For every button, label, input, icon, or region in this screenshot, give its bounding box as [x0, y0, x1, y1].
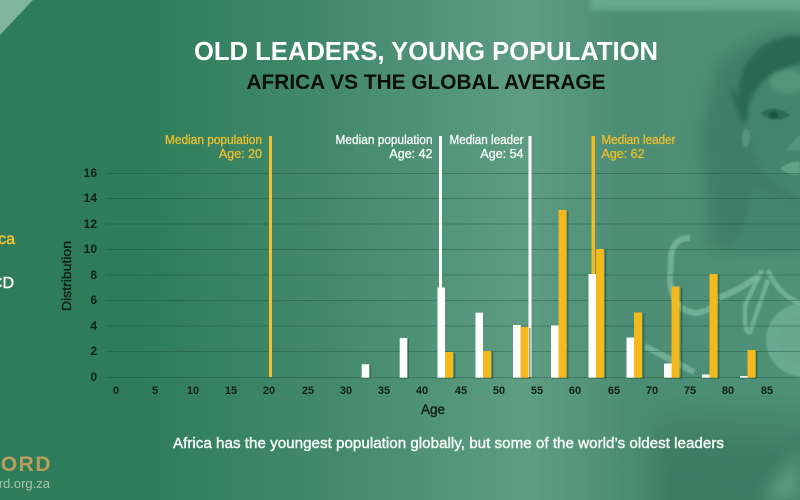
x axis labels: 35: [378, 385, 390, 397]
callout: median leader age 54: Median leader: [450, 133, 524, 147]
callout: median population age 20: [165, 133, 262, 161]
photo: young person: [590, 0, 800, 500]
grid lines: [106, 174, 800, 378]
y axis labels: 12: [84, 217, 97, 231]
y axis labels: 4: [90, 319, 97, 333]
callout: median population age 42: [336, 133, 433, 161]
callout: median population age 42: Median population: [336, 133, 433, 147]
x axis labels: 65: [608, 385, 620, 397]
yellow bars: leaders: [445, 210, 756, 378]
x axis labels: 30: [340, 385, 352, 397]
y axis labels: 0: [90, 370, 97, 384]
x axis labels: 25: [302, 385, 314, 397]
y axis labels: 6: [90, 293, 97, 307]
x axis labels: 70: [646, 385, 658, 397]
x axis labels: 60: [569, 385, 581, 397]
y axis labels: 2: [90, 344, 97, 358]
x axis labels: 5: [152, 385, 158, 397]
callout: median leader age 62: [602, 133, 676, 161]
x axis labels: 85: [761, 385, 773, 397]
y axis labels: 14: [84, 191, 97, 205]
x axis labels: 45: [455, 385, 467, 397]
x axis labels: 55: [531, 385, 543, 397]
x axis labels: 50: [493, 385, 505, 397]
title: OLD LEADERS, YOUNG POPULATION: [194, 36, 658, 66]
callout: median leader age 62: Median leader: [602, 133, 676, 147]
bar chart: [59, 136, 800, 417]
x axis labels: 10: [187, 385, 199, 397]
bar shadows: [362, 211, 758, 379]
x axis title: Age: [421, 402, 445, 417]
corner triangle: [0, 0, 33, 35]
y axis labels: 10: [84, 242, 97, 256]
y axis title: Distribution: [59, 241, 74, 311]
x axis labels: 0: [113, 385, 119, 397]
callout: median population age 20: Median population: [165, 133, 262, 147]
x axis labels: [113, 385, 773, 397]
callout: median leader age 54: Age: 54: [480, 147, 524, 161]
x axis labels: 75: [684, 385, 696, 397]
y axis labels: [84, 166, 97, 384]
subtitle: AFRICA VS THE GLOBAL AVERAGE: [246, 71, 606, 94]
callout: median leader age 62: Age: 62: [602, 147, 645, 161]
y axis labels: 16: [84, 166, 97, 180]
x axis labels: 80: [722, 385, 734, 397]
median lines: [269, 136, 595, 377]
callout: median population age 20: Age: 20: [219, 147, 262, 161]
logo: ACCORD (clipped at the edge): [0, 453, 52, 491]
x axis labels: 20: [263, 385, 275, 397]
callout: median population age 42: Age: 42: [389, 147, 433, 161]
legend: Africa and OECD (clipped at the edge): [0, 231, 15, 292]
y axis labels: 8: [90, 268, 97, 282]
x axis labels: 40: [416, 385, 428, 397]
white bars: population: [362, 274, 748, 378]
photo: collar and necklace: [645, 238, 800, 372]
x axis labels: 15: [225, 385, 237, 397]
callout: median leader age 54: [450, 133, 524, 161]
caption: Africa has the youngest population globally, but some of the world’s oldest leaders: [173, 435, 724, 452]
